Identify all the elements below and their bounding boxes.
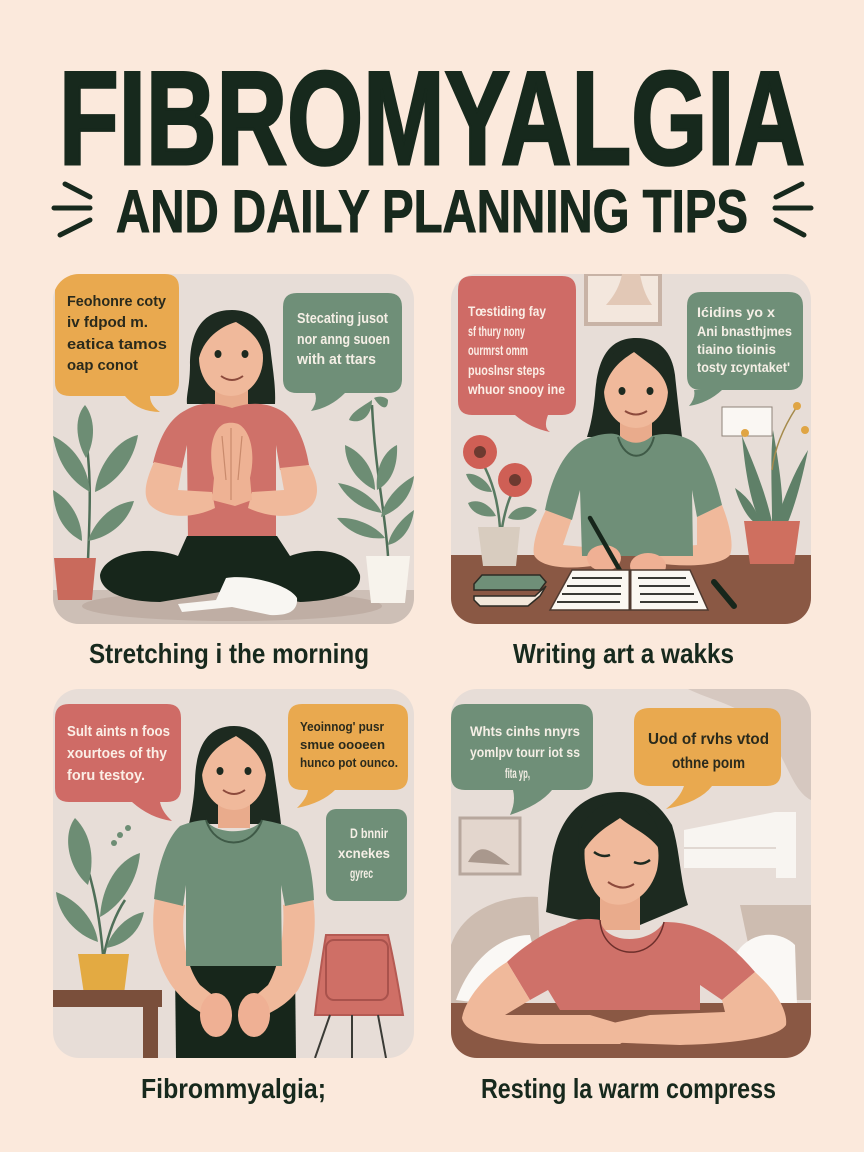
flower plant	[463, 435, 537, 566]
left plant	[53, 405, 138, 600]
side table	[53, 990, 162, 1058]
speech bubble: green: tiaino tioinis	[697, 341, 776, 357]
panel: stretching	[53, 274, 414, 624]
speech bubble: orange: Feohonre coty	[67, 293, 167, 310]
person: writing	[534, 338, 732, 579]
speech bubble: red	[55, 704, 181, 821]
pen on desk	[714, 582, 734, 606]
speech bubble: orange	[55, 274, 179, 412]
callout: green: xcnekes	[338, 845, 390, 861]
person: resting	[462, 792, 786, 1045]
right accent marks	[775, 184, 811, 235]
speech bubble: orange: Yeoinnog' pusr	[300, 719, 384, 734]
speech bubble: green: nor anng suoen	[297, 331, 390, 348]
speech bubble: green: Stecating jusot	[297, 310, 388, 327]
speech bubble: red: sf thury nony	[468, 323, 525, 339]
speech bubble: green: yomlpv tourr iot ss	[470, 744, 580, 760]
speech bubble: red: Tœstiding fay	[468, 303, 546, 319]
speech bubble: orange: Uod of rvhs vtod	[648, 731, 769, 748]
speech bubble: orange: hunco pot ounco.	[300, 755, 398, 770]
open notebook	[550, 570, 708, 610]
chair	[315, 935, 403, 1058]
speech bubble: red: puoslnsr steps	[468, 362, 545, 378]
speech bubble: orange: oap conot	[67, 357, 138, 374]
caption: resting: Resting la warm compress	[481, 1073, 776, 1104]
caption: standing: Fibrommyalgia;	[141, 1073, 326, 1104]
caption: writing: Writing art a wakks	[513, 638, 734, 669]
callout: green: D bnnir	[350, 825, 388, 841]
plant on table	[56, 818, 144, 994]
left accent marks	[54, 184, 90, 235]
callout: green	[326, 809, 407, 901]
speech bubble: orange: smue oooeen	[300, 737, 385, 752]
speech bubble: red: foru testoy.	[67, 767, 145, 784]
speech bubble: green: Whts cinhs nnyrs	[470, 723, 580, 739]
wall frame	[586, 274, 660, 324]
panel: writing	[451, 274, 811, 624]
right plant	[337, 397, 414, 603]
speech bubble: green: with at ttars	[296, 351, 376, 368]
caption: stretching: Stretching i the morning	[89, 638, 369, 669]
speech bubble: green	[687, 292, 803, 406]
panel: standing	[53, 689, 414, 1058]
speech bubble: green	[283, 293, 402, 411]
speech bubble: green: tosty ɪcyntaket'	[697, 359, 790, 375]
wall picture	[460, 818, 520, 874]
speech bubble: green: Ićidins yo x	[697, 304, 775, 320]
callout: green: gyrec	[350, 865, 373, 881]
stacked books	[474, 575, 546, 606]
pillows and bed	[451, 897, 811, 1058]
speech bubble: orange	[634, 708, 781, 809]
speech bubble: green	[451, 704, 593, 815]
panel: resting	[451, 689, 811, 1058]
speech bubble: orange	[288, 704, 408, 808]
speech bubble: red: ourmrst omm	[468, 342, 528, 358]
speech bubble: green: Ani bnasthjmes	[697, 323, 792, 339]
speech bubble: red: whuor snooy ine	[467, 381, 565, 397]
speech bubble: green: fita yp,	[505, 765, 530, 781]
wall curtain	[688, 689, 811, 800]
person: standing	[153, 726, 315, 1058]
wall note	[722, 407, 772, 436]
person: seated stretching	[100, 310, 360, 615]
speech bubble: red	[458, 276, 576, 432]
potted plant	[735, 402, 809, 564]
speech bubble: red: xourtoes of thy	[67, 745, 168, 762]
speech bubble: orange: iv fdpod m.	[67, 314, 148, 331]
speech bubble: orange: eatica tamos	[67, 336, 167, 353]
wall shelf	[684, 812, 796, 878]
speech bubble: orange: othne poım	[672, 755, 745, 772]
speech bubble: red: Sult aints n foos	[67, 723, 170, 740]
